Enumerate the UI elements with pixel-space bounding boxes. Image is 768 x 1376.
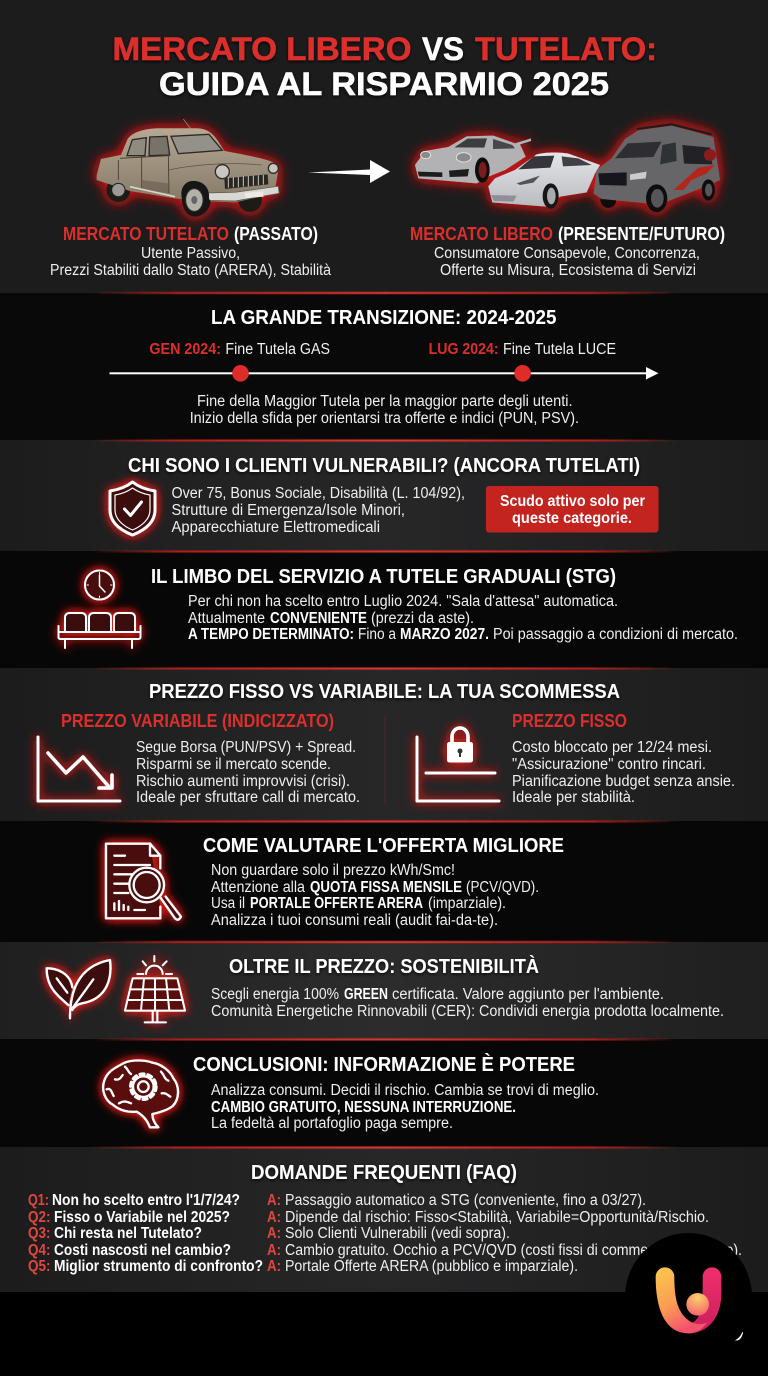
title: TUTELATO: xyxy=(475,31,657,67)
text block: conclusions xyxy=(211,1082,599,1132)
faq row 5 xyxy=(28,1258,578,1275)
faq row 3: A: xyxy=(267,1225,281,1242)
icon: solar panel xyxy=(125,956,185,1022)
arrow: past to future xyxy=(308,160,390,183)
text block: fixed price: Ideale per stabilità. xyxy=(512,789,635,806)
faq row 2: Fisso o Variabile nel 2025? xyxy=(54,1209,230,1226)
text block: stg description: (prezzi da aste). xyxy=(371,610,474,627)
panel: la grande transizione xyxy=(0,293,768,440)
icon: locked price chart xyxy=(417,728,499,801)
heading: fisso vs variabile: PREZZO FISSO VS VARIABILE: LA TUA SCOMMESSA xyxy=(149,681,620,703)
timeline label: gas: GEN 2024: xyxy=(149,341,221,358)
text block: stg description: Poi passaggio a condizioni di mercato. xyxy=(493,626,738,643)
subheading: prezzo fisso: PREZZO FISSO xyxy=(512,711,627,731)
heading: conclusioni: CONCLUSIONI: INFORMAZIONE È POTERE xyxy=(193,1053,575,1076)
heading: sostenibilita: OLTRE IL PREZZO: SOSTENIBILITÀ xyxy=(229,955,539,978)
heading: clienti vulnerabili: CHI SONO I CLIENTI VULNERABILI? (ANCORA TUTELATI) xyxy=(128,455,640,477)
title xyxy=(112,31,657,102)
text block: transition description: Fine della Maggior Tutela per la maggior parte degli utenti. xyxy=(197,393,572,410)
text block: vulnerable categories xyxy=(172,485,465,536)
text block: variable price: Ideale per sfruttare call di mercato. xyxy=(136,789,360,806)
panel: clienti vulnerabili xyxy=(0,440,768,551)
text block: mercato libero: Consumatore Consapevole, Concorrenza, xyxy=(434,245,700,262)
logo badge xyxy=(625,1233,752,1360)
panel: prezzo fisso vs variabile xyxy=(0,668,768,821)
text block: offer checklist: Non guardare solo il prezzo kWh/Smc! xyxy=(211,862,455,879)
text block: offer checklist: Analizza i tuoi consumi reali (audit fai-da-te). xyxy=(211,912,498,929)
title: GUIDA AL RISPARMIO 2025 xyxy=(159,66,609,102)
faq row 1: Q1: xyxy=(28,1192,49,1209)
text block: stg description: CONVENIENTE xyxy=(270,610,367,627)
faq row 4: A: xyxy=(267,1242,281,1259)
text block: offer checklist: (imparziale). xyxy=(428,895,506,912)
text block: stg description: Per chi non ha scelto entro Luglio 2024. "Sala d'attesa" automatica. xyxy=(188,593,618,610)
text block: conclusions: La fedeltà al portafoglio paga sempre. xyxy=(211,1115,453,1132)
callout: scudo attivo: queste categorie. xyxy=(512,510,632,527)
text block: stg description: Attualmente xyxy=(188,610,265,627)
faq row 4: Costi nascosti nel cambio? xyxy=(54,1242,231,1259)
text block: stg description: Fino a xyxy=(358,626,396,643)
text block: conclusions: CAMBIO GRATUITO, NESSUNA INTERRUZIONE. xyxy=(211,1099,516,1116)
text block: transition description xyxy=(190,393,579,427)
text block: offer checklist: PORTALE OFFERTE ARERA xyxy=(250,895,423,912)
text block: offer checklist xyxy=(211,862,539,929)
faq row 3 xyxy=(28,1225,510,1242)
icon: clock xyxy=(85,570,114,600)
faq row 5: Miglior strumento di confronto? xyxy=(54,1258,263,1275)
icon: falling price chart xyxy=(38,737,120,801)
timeline arrow xyxy=(110,365,658,382)
text block: fixed price: Costo bloccato per 12/24 mesi. xyxy=(512,739,712,756)
faq row 4 xyxy=(28,1242,742,1259)
faq row 3: Solo Clienti Vulnerabili (vedi sopra). xyxy=(285,1225,510,1242)
faq row 2 xyxy=(28,1209,709,1226)
text block: variable price: Rischio aumenti improvvisi (crisi). xyxy=(136,773,350,790)
text block: vulnerable categories: Over 75, Bonus Sociale, Disabilità (L. 104/92), xyxy=(172,485,465,502)
title: VS xyxy=(422,31,464,67)
icon: vintage car xyxy=(97,119,280,217)
text block: transition description: Inizio della sfida per orientarsi tra offerte e indici (PUN, PSV). xyxy=(190,410,579,427)
panel: page header and market comparison xyxy=(0,0,768,293)
faq row 5: Q5: xyxy=(28,1258,50,1275)
text block: fixed price xyxy=(512,739,735,806)
timeline label: gas xyxy=(149,341,330,358)
text block: sustainability: certificata. Valore aggiunto per l'ambiente. xyxy=(392,986,664,1003)
faq row 5: A: xyxy=(267,1258,281,1275)
text block: stg description: A TEMPO DETERMINATO: xyxy=(188,626,354,643)
faq row 2: Dipende dal rischio: Fisso<Stabilità, Variabile=Opportunità/Rischio. xyxy=(285,1209,709,1226)
text block: variable price: Segue Borsa (PUN/PSV) + Spread. xyxy=(136,739,356,756)
text block: offer checklist: QUOTA FISSA MENSILE xyxy=(310,879,462,896)
callout: scudo attivo xyxy=(486,486,658,532)
icon: modern cars xyxy=(415,124,720,212)
faq row 1: Non ho scelto entro l'1/7/24? xyxy=(52,1192,240,1209)
text block: mercato libero xyxy=(410,224,725,279)
title: MERCATO LIBERO xyxy=(112,31,412,67)
text block: mercato libero: (PRESENTE/FUTURO) xyxy=(558,224,725,244)
text block: mercato libero: MERCATO LIBERO xyxy=(410,224,553,244)
subheading: prezzo variabile: PREZZO VARIABILE (INDICIZZATO) xyxy=(61,711,334,731)
text block: conclusions: Analizza consumi. Decidi il rischio. Cambia se trovi di meglio. xyxy=(211,1082,599,1099)
timeline label: luce xyxy=(429,341,616,358)
text block: mercato tutelato: Prezzi Stabiliti dallo Stato (ARERA), Stabilità xyxy=(50,262,331,279)
faq row 2: A: xyxy=(267,1209,281,1226)
icon: leaves xyxy=(47,960,110,1018)
icon: shield xyxy=(110,482,155,535)
faq row 1 xyxy=(28,1192,646,1209)
text block: offer checklist: Usa il xyxy=(211,895,245,912)
faq row 1: Passaggio automatico a STG (conveniente, fino a 03/27). xyxy=(285,1192,646,1209)
faq row 4: Q4: xyxy=(28,1242,50,1259)
text block: variable price xyxy=(136,739,360,806)
text block: offer checklist: (PCV/QVD). xyxy=(466,879,539,896)
text block: stg description xyxy=(188,593,738,643)
panel: faq xyxy=(0,1147,768,1292)
faq row 1: A: xyxy=(267,1192,281,1209)
text block: sustainability xyxy=(211,986,724,1020)
text block: vulnerable categories: Apparecchiature Elettromedicali xyxy=(172,519,380,536)
panel: sostenibilita xyxy=(0,942,768,1039)
text block: sustainability: GREEN xyxy=(344,986,388,1003)
text block: sustainability: Scegli energia 100% xyxy=(211,986,339,1003)
faq row 3: Chi resta nel Tutelato? xyxy=(54,1225,202,1242)
callout: scudo attivo: Scudo attivo solo per xyxy=(500,493,645,510)
text block: sustainability: Comunità Energetiche Rinnovabili (CER): Condividi energia prodotta localmente. xyxy=(211,1003,724,1020)
icon: waiting room seats xyxy=(58,613,140,648)
text block: mercato tutelato xyxy=(50,224,331,279)
text block: stg description: MARZO 2027. xyxy=(400,626,489,643)
faq row 2: Q2: xyxy=(28,1209,50,1226)
text block: variable price: Risparmi se il mercato scende. xyxy=(136,756,331,773)
panel: valutare offerta xyxy=(0,821,768,942)
text block: vulnerable categories: Strutture di Emergenza/Isole Minori, xyxy=(172,502,405,519)
text block: mercato tutelato: Utente Passivo, xyxy=(141,245,240,262)
heading: offerta migliore: COME VALUTARE L'OFFERTA MIGLIORE xyxy=(203,835,564,857)
panel: conclusioni xyxy=(0,1039,768,1147)
text block: mercato tutelato: (PASSATO) xyxy=(234,224,318,244)
text block: mercato tutelato: MERCATO TUTELATO xyxy=(63,224,229,244)
panel: servizio a tutele graduali xyxy=(0,551,768,668)
text block: offer checklist: Attenzione alla xyxy=(211,879,305,896)
icon: document with magnifier xyxy=(106,844,181,920)
heading: faq: DOMANDE FREQUENTI (FAQ) xyxy=(251,1162,517,1184)
icon: brain with gear xyxy=(103,1060,178,1127)
faq row 5: Portale Offerte ARERA (pubblico e imparziale). xyxy=(285,1258,578,1275)
text block: fixed price: "Assicurazione" contro rincari. xyxy=(512,756,706,773)
timeline label: luce: Fine Tutela LUCE xyxy=(503,341,616,358)
timeline label: gas: Fine Tutela GAS xyxy=(225,341,330,358)
text block: mercato libero: Offerte su Misura, Ecosistema di Servizi xyxy=(440,262,696,279)
heading: stg: IL LIMBO DEL SERVIZIO A TUTELE GRADUALI (STG) xyxy=(151,566,616,588)
text block: fixed price: Pianificazione budget senza ansie. xyxy=(512,773,735,790)
timeline label: luce: LUG 2024: xyxy=(429,341,499,358)
faq row 3: Q3: xyxy=(28,1225,50,1242)
heading: transizione: LA GRANDE TRANSIZIONE: 2024-2025 xyxy=(211,307,556,329)
